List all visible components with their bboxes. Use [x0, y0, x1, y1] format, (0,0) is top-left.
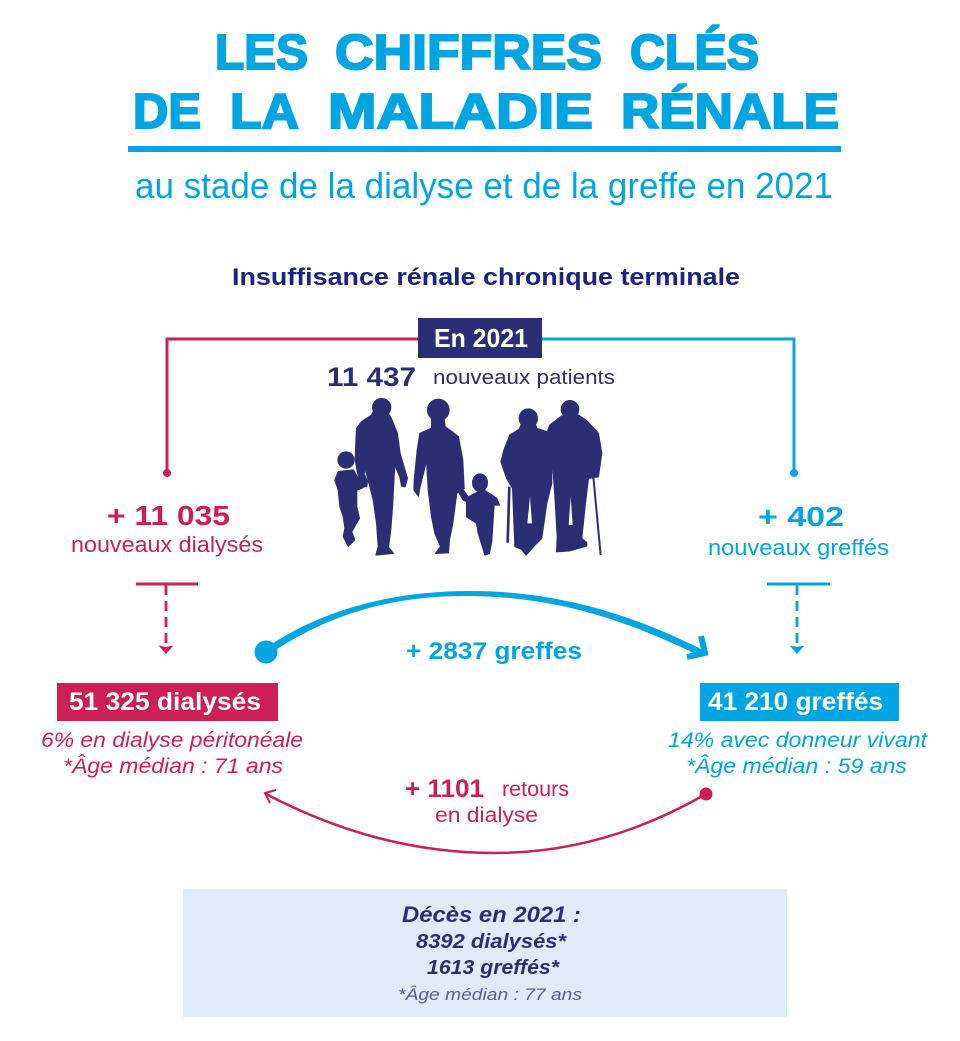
- label: returns to dialysis: retours: [502, 778, 569, 801]
- panel: deaths: *Âge médian : 77 ans: [398, 985, 583, 1004]
- icon: family silhouettes: [335, 399, 602, 555]
- section heading: Insuffisance rénale chronique terminale: [232, 264, 740, 291]
- dialysis details: [41, 729, 303, 778]
- connector: to new transplant patients: [542, 339, 798, 477]
- label: returns to dialysis: [405, 775, 569, 827]
- new transplant patients: nouveaux greffés: [708, 535, 889, 560]
- new transplant patients: [708, 501, 889, 560]
- title: LA: [230, 85, 299, 139]
- new dialysis patients: nouveaux dialysés: [71, 532, 263, 557]
- new transplant patients: + 402: [758, 501, 844, 532]
- box: transplant total: [700, 683, 899, 721]
- title: [133, 26, 839, 139]
- transplant details: 14% avec donneur vivant: [668, 729, 928, 752]
- panel: deaths: Décès en 2021 :: [402, 902, 581, 927]
- new dialysis patients: [71, 500, 263, 557]
- connector: to new dialysis patients: [163, 339, 418, 477]
- new patients: 11 437: [327, 362, 416, 392]
- panel: deaths: 1613 greffés*: [427, 957, 560, 979]
- title: CLÉS: [630, 26, 759, 80]
- label: returns to dialysis: + 1101: [405, 775, 484, 803]
- panel: deaths: [183, 889, 787, 1017]
- transplant details: *Âge médian : 59 ans: [686, 755, 908, 778]
- arrow: transplant to dialysis: [265, 788, 712, 853]
- dialysis details: *Âge médian : 71 ans: [63, 755, 284, 778]
- new patients: [327, 362, 615, 392]
- label: returns to dialysis: en dialyse: [435, 804, 538, 827]
- title: LES: [215, 26, 308, 80]
- panel: deaths: 8392 dialysés*: [416, 931, 567, 953]
- dialysis details: 6% en dialyse péritonéale: [41, 729, 303, 752]
- title: RÉNALE: [621, 85, 839, 139]
- box: dialysis total: [57, 683, 278, 721]
- transplant details: [668, 729, 928, 778]
- label: transplants: + 2837 greffes: [406, 638, 582, 665]
- arrow: dashed to transplant: [767, 584, 830, 654]
- title: CHIFFRES: [335, 26, 602, 80]
- arrow: dashed to dialysis: [136, 584, 198, 654]
- badge: En 2021: En 2021: [434, 323, 528, 353]
- arrow: dialysis to transplant: [254, 591, 705, 664]
- title: DE: [133, 85, 201, 139]
- subtitle: au stade de la dialyse et de la greffe en 2021: [135, 165, 833, 206]
- title: MALADIE: [328, 85, 593, 139]
- new patients: nouveaux patients: [433, 367, 615, 389]
- box: dialysis total: 51 325 dialysés: [69, 688, 261, 716]
- new dialysis patients: + 11 035: [107, 500, 230, 531]
- badge: En 2021: [418, 318, 542, 358]
- box: transplant total: 41 210 greffés: [708, 688, 883, 716]
